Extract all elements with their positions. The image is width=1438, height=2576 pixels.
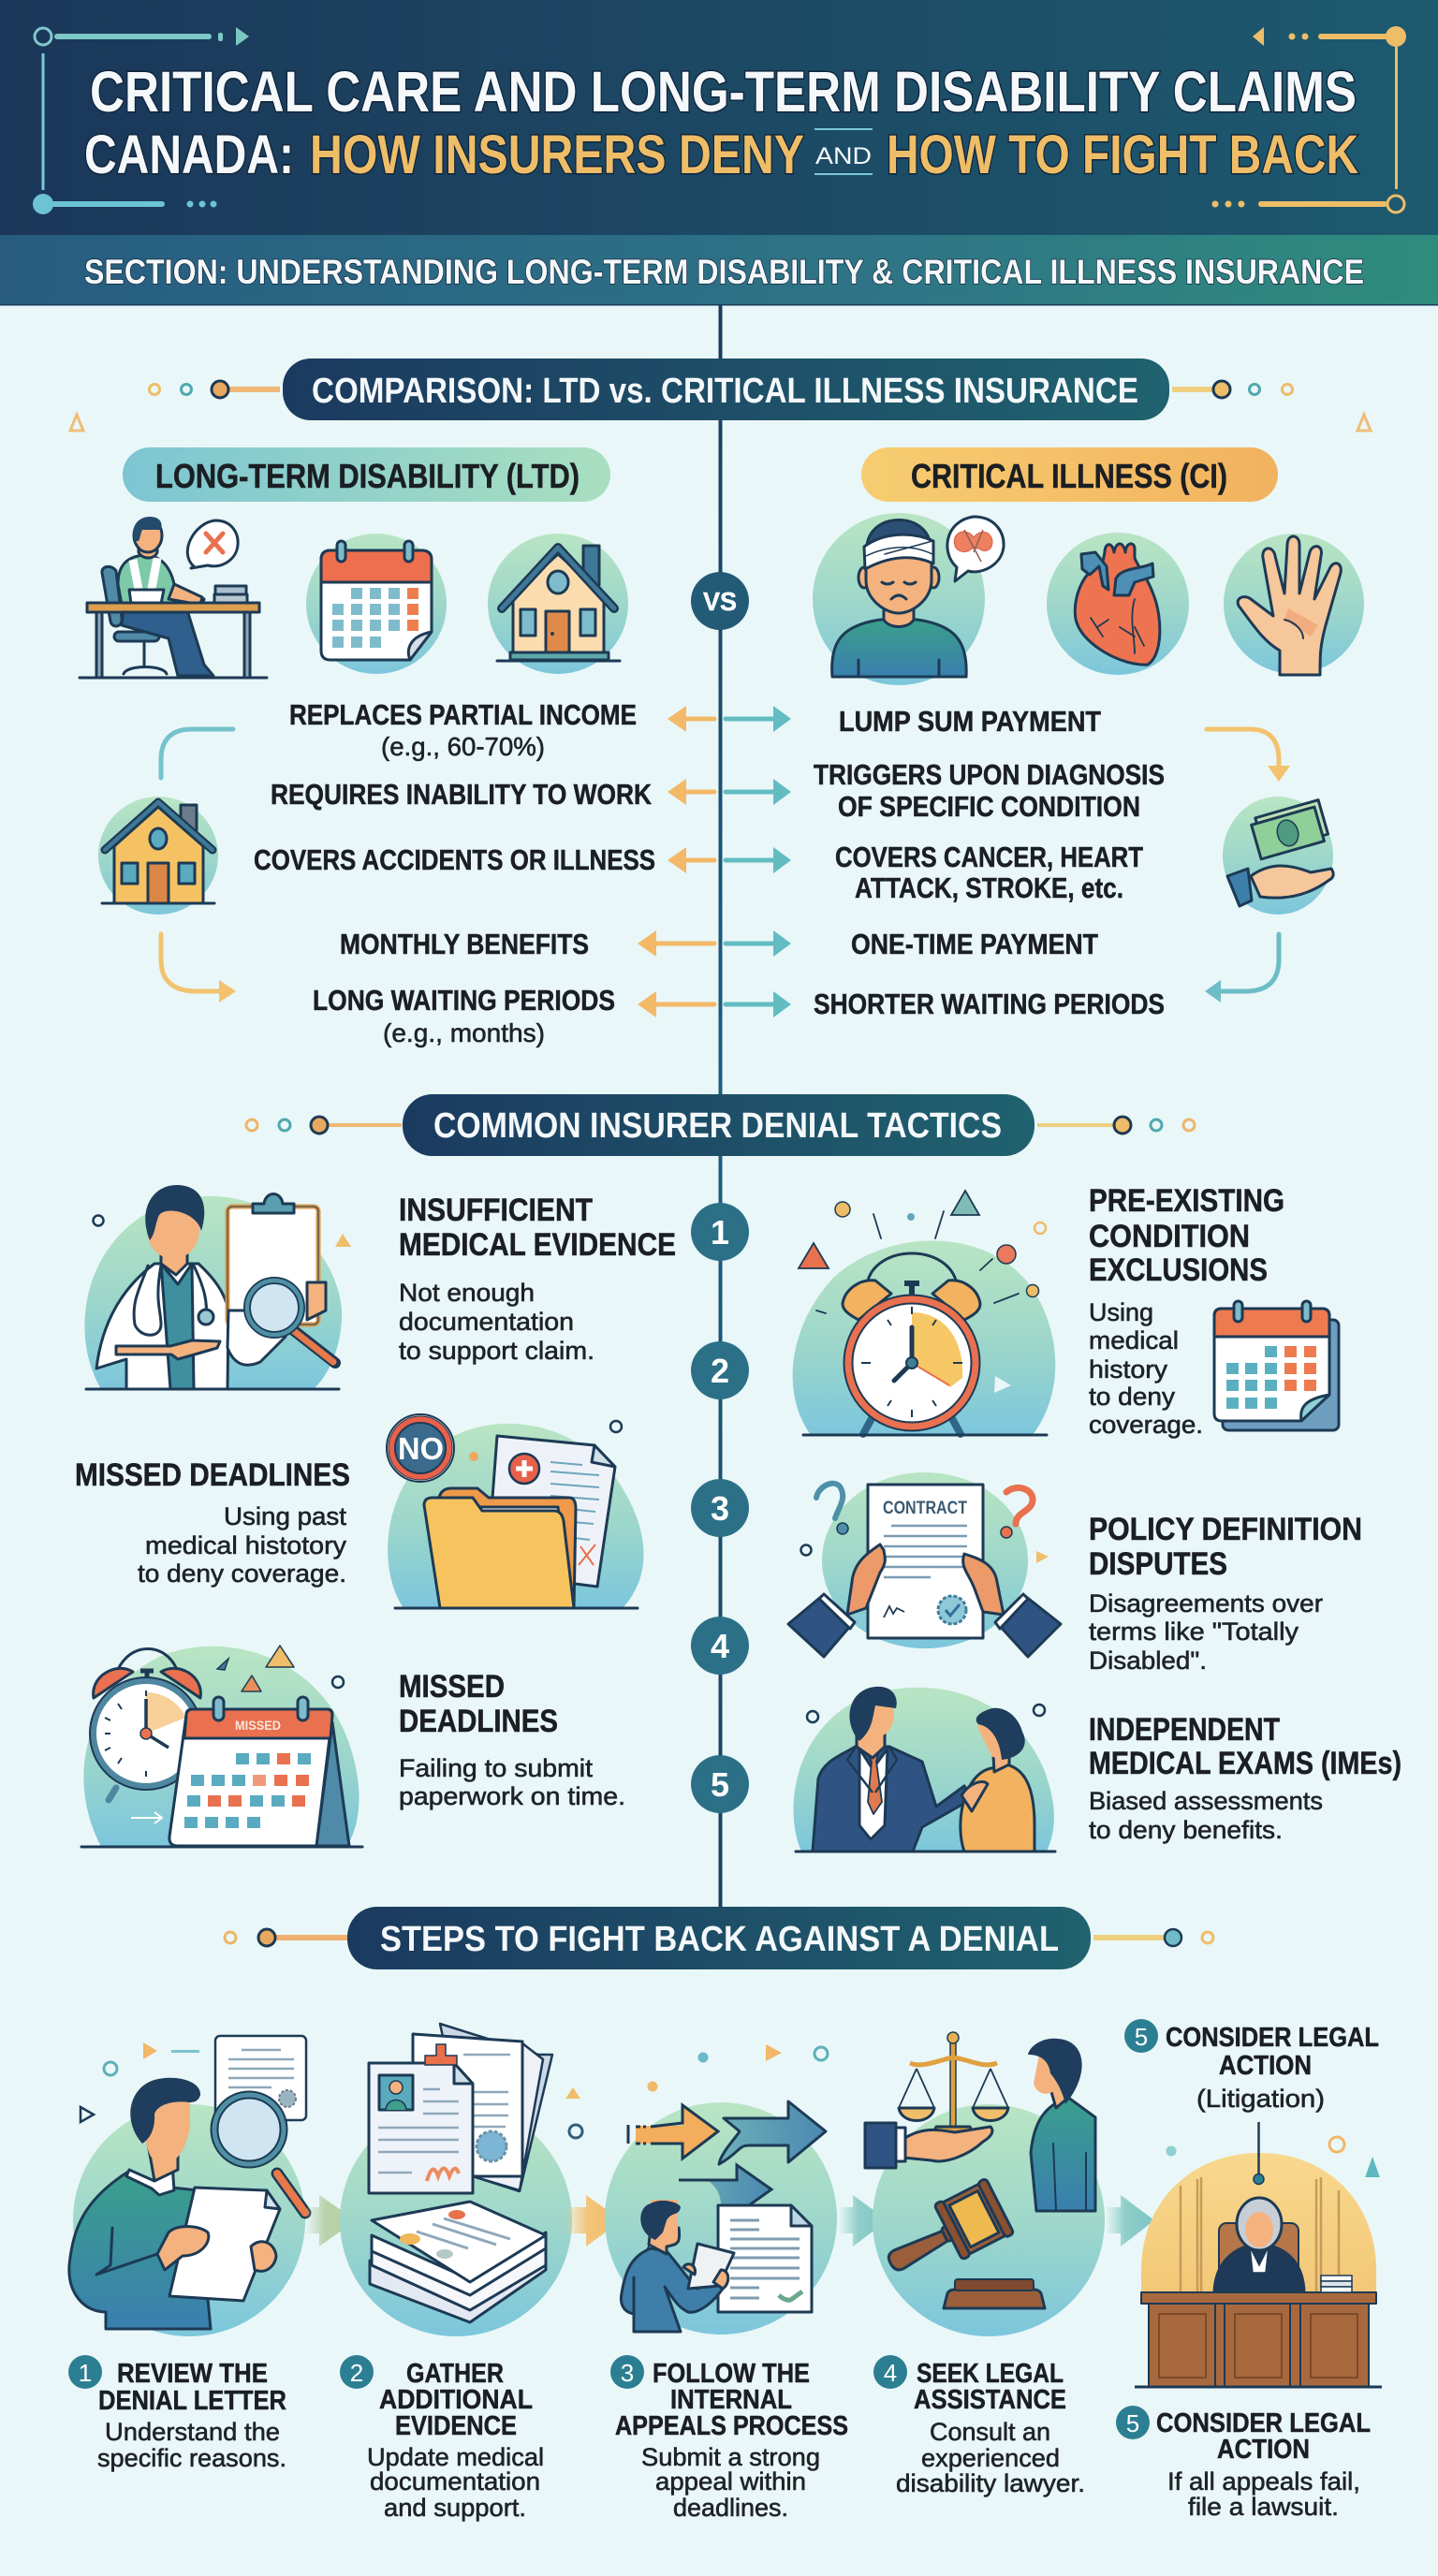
panel: tactic policy definition disputes bbox=[788, 1472, 1362, 1675]
icon: patient with head bandage bbox=[813, 513, 1004, 685]
text: step 1: REVIEW THE bbox=[117, 2359, 268, 2389]
icon: vs badge: VS bbox=[703, 587, 737, 616]
icon: clock and missed calendar bbox=[81, 1646, 362, 1847]
text: pre-existing condition bbox=[1089, 1183, 1284, 1439]
text: pre-existing condition: medical bbox=[1089, 1326, 1179, 1354]
text: step 2: Update medical bbox=[367, 2443, 544, 2471]
text: step 5 top label: (Litigation) bbox=[1196, 2085, 1325, 2113]
icon: anatomical heart bbox=[1047, 533, 1189, 675]
section band bbox=[0, 235, 1438, 305]
CI heading pill bbox=[861, 447, 1278, 502]
text: step 1 bbox=[68, 2355, 286, 2472]
text: step 3: APPEALS PROCESS bbox=[615, 2411, 848, 2441]
heading: steps to fight back bbox=[225, 1907, 1213, 1969]
text: step 5 bottom label bbox=[1116, 2406, 1371, 2521]
LTD feature list: COVERS ACCIDENTS OR ILLNESS bbox=[254, 843, 655, 876]
arrow: teal connector into house bbox=[161, 729, 233, 778]
text: step 5 bottom label: If all appeals fail, bbox=[1167, 2467, 1360, 2496]
text: step 5 bottom label: CONSIDER LEGAL bbox=[1156, 2408, 1371, 2438]
icon: small calendar bbox=[1214, 1301, 1339, 1430]
text: step 5 top label: 5 bbox=[1135, 2023, 1148, 2051]
text: step 2: EVIDENCE bbox=[395, 2411, 517, 2441]
panel: tactic missed deadlines (folder) bbox=[75, 1414, 644, 1608]
LTD feature list: REQUIRES INABILITY TO WORK bbox=[271, 778, 653, 811]
text: policy definition disputes: DISPUTES bbox=[1089, 1546, 1227, 1582]
header banner bbox=[0, 0, 1438, 235]
text: step 1: Understand the bbox=[105, 2418, 280, 2446]
text: step 4 bbox=[873, 2355, 1085, 2497]
arrow: step 1 to 2 bbox=[305, 2195, 356, 2247]
panel: tactic insufficient medical evidence bbox=[84, 1185, 676, 1389]
text: missed deadlines, paperwork: paperwork on time. bbox=[399, 1782, 625, 1810]
icon: alarm clock bbox=[793, 1191, 1055, 1435]
text: step 5 bottom label: file a lawsuit. bbox=[1188, 2493, 1339, 2521]
text: policy definition disputes: POLICY DEFINITION bbox=[1089, 1512, 1362, 1547]
text: missed deadlines, paperwork: DEADLINES bbox=[399, 1704, 558, 1739]
icon: contract held by two hands: CONTRACT bbox=[883, 1499, 967, 1518]
text: insufficient medical evidence: Not enough bbox=[399, 1279, 535, 1307]
text: pre-existing condition: EXCLUSIONS bbox=[1089, 1252, 1268, 1288]
text: step 3: FOLLOW THE bbox=[653, 2359, 810, 2389]
numbered markers: 5 bbox=[711, 1765, 729, 1804]
text: step 4: SEEK LEGAL bbox=[917, 2359, 1064, 2389]
heading: common insurer denial tactics bbox=[246, 1094, 1195, 1156]
text: independent medical exams: Biased assessments bbox=[1089, 1787, 1323, 1815]
arrow: step 4 to 5 bbox=[1106, 2195, 1154, 2247]
text: step 5 top label: ACTION bbox=[1219, 2051, 1312, 2081]
text: step 1: DENIAL LETTER bbox=[98, 2386, 286, 2416]
panel: tactic missed deadlines (clock and calendar) bbox=[81, 1646, 625, 1847]
CI feature list: SHORTER WAITING PERIODS bbox=[814, 988, 1165, 1020]
panel: step 3 follow the internal appeals process bbox=[605, 2044, 848, 2522]
text: insufficient medical evidence: INSUFFICIENT bbox=[399, 1193, 593, 1228]
text: step 4: Consult an bbox=[930, 2418, 1050, 2446]
text: pre-existing condition: history bbox=[1089, 1355, 1168, 1383]
icon: stacked medical documents bbox=[340, 2024, 582, 2336]
arrow: step 3 to 4 bbox=[839, 2195, 888, 2247]
icon: small house bbox=[98, 797, 218, 915]
central divider line bbox=[719, 305, 723, 1915]
LTD feature list: (e.g., months) bbox=[383, 1018, 545, 1047]
icon: calendar bbox=[306, 534, 447, 674]
comparison arrows bbox=[638, 706, 791, 1017]
icon: contract held by two hands bbox=[788, 1472, 1061, 1657]
numbered markers bbox=[691, 1203, 749, 1813]
panel: step 2 gather additional evidence bbox=[340, 2024, 582, 2522]
text: step 4: 4 bbox=[884, 2359, 897, 2387]
title: CANADA: bbox=[84, 124, 294, 185]
panel: long-term disability column bbox=[80, 447, 655, 1047]
CI feature list: ATTACK, STROKE, etc. bbox=[855, 871, 1123, 904]
heading: comparison bbox=[70, 359, 1371, 431]
text: independent medical exams: to deny benefits. bbox=[1089, 1816, 1283, 1844]
text: pre-existing condition: coverage. bbox=[1089, 1411, 1203, 1439]
heading: common insurer denial tactics: COMMON INSURER DENIAL TACTICS bbox=[433, 1106, 1002, 1146]
text: step 1: 1 bbox=[79, 2359, 92, 2387]
header frame ornaments bbox=[33, 26, 1406, 214]
icon: judge at the bench bbox=[1135, 2122, 1382, 2387]
icon: doctor with clipboard bbox=[84, 1185, 351, 1389]
panel: tactic independent medical exams bbox=[793, 1687, 1401, 1852]
LTD feature list: MONTHLY BENEFITS bbox=[340, 928, 589, 960]
text: insufficient medical evidence: to support claim. bbox=[399, 1337, 594, 1365]
title bbox=[84, 60, 1358, 185]
CI heading pill: CRITICAL ILLNESS (CI) bbox=[911, 457, 1227, 495]
LTD feature list bbox=[254, 698, 655, 1047]
LTD feature list: (e.g., 60-70%) bbox=[381, 732, 545, 761]
text: step 4: disability lawyer. bbox=[896, 2469, 1085, 2497]
panel: step 1 review the denial letter bbox=[68, 2036, 306, 2472]
text: missed deadlines, paperwork: MISSED bbox=[399, 1669, 505, 1705]
text: step 5 top label bbox=[1124, 2019, 1379, 2113]
text: policy definition disputes: terms like "Totally bbox=[1089, 1617, 1299, 1646]
panel: step 5 consider legal action bbox=[1116, 2019, 1382, 2521]
text: step 3: Submit a strong bbox=[641, 2443, 820, 2471]
text: missed deadlines, past history: MISSED DEADLINES bbox=[75, 1457, 350, 1493]
panel: critical illness column bbox=[813, 447, 1364, 1020]
text: policy definition disputes: Disabled". bbox=[1089, 1647, 1207, 1675]
text: step 3: INTERNAL bbox=[670, 2385, 792, 2415]
text: insufficient medical evidence: documentation bbox=[399, 1308, 574, 1336]
text: independent medical exams bbox=[1089, 1712, 1401, 1844]
icon: person with appeal arrows bbox=[605, 2044, 837, 2334]
heading: steps to fight back: STEPS TO FIGHT BACK AGAINST A DENIAL bbox=[380, 1920, 1059, 1959]
text: step 3 bbox=[610, 2355, 848, 2522]
text: missed deadlines, paperwork bbox=[399, 1669, 625, 1810]
CI feature list: LUMP SUM PAYMENT bbox=[839, 705, 1101, 738]
LTD heading pill: LONG-TERM DISABILITY (LTD) bbox=[155, 457, 580, 495]
CI feature list: TRIGGERS UPON DIAGNOSIS bbox=[814, 758, 1165, 791]
LTD heading pill bbox=[123, 447, 610, 502]
arrow: teal connector out of money bbox=[1205, 934, 1279, 1003]
icon: denied folder bbox=[387, 1414, 644, 1608]
arrow: step 2 to 3 bbox=[565, 2195, 622, 2247]
CI feature list: COVERS CANCER, HEART bbox=[835, 841, 1143, 873]
text: step 3: deadlines. bbox=[673, 2494, 788, 2522]
title: AND bbox=[815, 143, 872, 169]
numbered markers: 2 bbox=[711, 1352, 729, 1390]
text: pre-existing condition: CONDITION bbox=[1089, 1219, 1250, 1254]
text: step 5 bottom label: 5 bbox=[1126, 2409, 1139, 2437]
text: step 2: 2 bbox=[350, 2359, 363, 2387]
icon: examiner and patient bbox=[793, 1687, 1055, 1852]
text: missed deadlines, paperwork: Failing to submit bbox=[399, 1754, 594, 1782]
text: step 3: 3 bbox=[621, 2359, 634, 2387]
text: policy definition disputes: Disagreements over bbox=[1089, 1589, 1323, 1617]
text: step 5 bottom label: ACTION bbox=[1217, 2435, 1310, 2465]
LTD feature list: REPLACES PARTIAL INCOME bbox=[289, 698, 637, 731]
text: policy definition disputes bbox=[1089, 1512, 1362, 1675]
text: pre-existing condition: Using bbox=[1089, 1298, 1153, 1326]
text: step 2: ADDITIONAL bbox=[379, 2385, 533, 2415]
numbered markers: 1 bbox=[711, 1213, 729, 1251]
text: step 2 bbox=[340, 2355, 544, 2522]
text: pre-existing condition: to deny bbox=[1089, 1383, 1176, 1411]
text: step 2: documentation bbox=[370, 2467, 540, 2496]
text: step 5 top label: CONSIDER LEGAL bbox=[1166, 2023, 1379, 2053]
icon: man reading letter bbox=[69, 2036, 306, 2336]
icon: house bbox=[488, 534, 628, 674]
numbered markers: 4 bbox=[711, 1627, 729, 1665]
icon: injured worker at desk bbox=[80, 517, 267, 678]
text: step 1: specific reasons. bbox=[97, 2444, 286, 2472]
text: insufficient medical evidence bbox=[399, 1193, 676, 1365]
arrow: gold connector into money bbox=[1207, 729, 1290, 782]
heading: comparison: COMPARISON: LTD vs. CRITICAL ILLNESS INSURANCE bbox=[312, 372, 1138, 411]
text: step 2: and support. bbox=[384, 2494, 526, 2522]
LTD feature list: LONG WAITING PERIODS bbox=[313, 984, 615, 1017]
numbered markers: 3 bbox=[711, 1489, 729, 1528]
text: pre-existing condition: PRE-EXISTING bbox=[1089, 1183, 1284, 1219]
text: missed deadlines, past history: to deny coverage. bbox=[138, 1559, 346, 1588]
title: HOW INSURERS DENY bbox=[310, 124, 804, 185]
panel: step 4 seek legal assistance bbox=[865, 2032, 1105, 2497]
icon: denied folder: NO bbox=[398, 1431, 444, 1466]
text: step 2: GATHER bbox=[406, 2359, 504, 2389]
icon: hand with wound bbox=[1224, 534, 1364, 675]
text: step 4: ASSISTANCE bbox=[914, 2385, 1066, 2415]
text: missed deadlines, past history: medical histotory bbox=[145, 1531, 347, 1559]
icon: clock and missed calendar: MISSED bbox=[235, 1718, 281, 1733]
text: insufficient medical evidence: MEDICAL EVIDENCE bbox=[399, 1227, 676, 1263]
icon: cash in hand bbox=[1223, 797, 1333, 915]
panel: tactic pre-existing condition exclusions bbox=[793, 1183, 1339, 1439]
text: missed deadlines, past history: Using past bbox=[224, 1502, 346, 1530]
CI feature list: ONE-TIME PAYMENT bbox=[851, 928, 1098, 960]
text: step 4: experienced bbox=[921, 2444, 1060, 2472]
icon: scales, gavel and lawyer bbox=[865, 2032, 1105, 2336]
icon: vs badge bbox=[691, 572, 749, 630]
CI feature list bbox=[814, 705, 1165, 1020]
text: independent medical exams: INDEPENDENT bbox=[1089, 1712, 1280, 1748]
CI feature list: OF SPECIFIC CONDITION bbox=[838, 790, 1140, 823]
text: missed deadlines, past history bbox=[75, 1457, 350, 1588]
text: step 3: appeal within bbox=[655, 2467, 806, 2496]
arrow: gold connector out of house bbox=[161, 934, 236, 1003]
